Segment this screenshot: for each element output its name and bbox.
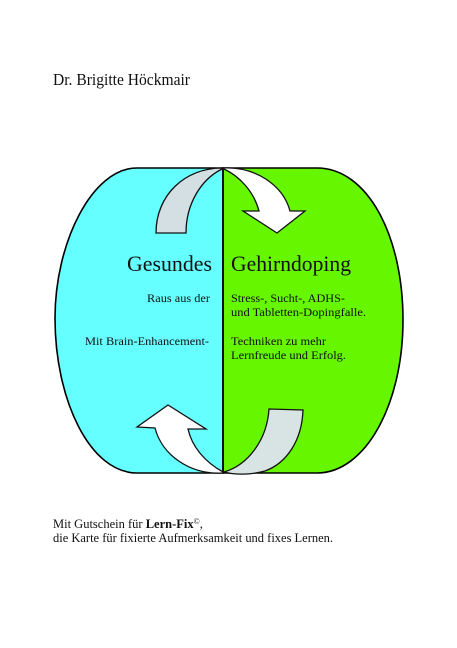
text: right block 2: Techniken zu mehr	[231, 334, 326, 348]
text: right block 2	[231, 334, 346, 362]
author name: Dr. Brigitte Höckmair	[53, 70, 190, 89]
footer text: ,	[200, 517, 203, 531]
text: left line 2: Mit Brain-Enhancement-	[85, 334, 209, 348]
text: right block 2: Lernfreude und Erfolg.	[231, 348, 346, 362]
arrow: top white	[222, 168, 305, 233]
arrow: bottom white	[137, 405, 223, 473]
footer text: ©	[194, 517, 200, 526]
footer text	[53, 517, 333, 545]
arrow: bottom grey	[224, 409, 303, 474]
panel: left cyan half	[55, 168, 223, 473]
central divider	[222, 168, 224, 473]
footer text: die Karte für fixierte Aufmerksamkeit und fixes Lernen.	[53, 531, 333, 545]
text: right block 1: Stress-, Sucht-, ADHS-	[231, 291, 345, 305]
heading: Gehirndoping: Gehirndoping	[231, 251, 351, 276]
panel: right green half	[223, 168, 403, 473]
arrow: top grey	[156, 168, 222, 233]
text: left line 1: Raus aus der	[147, 291, 210, 305]
heading: Gesundes: Gesundes	[127, 251, 212, 276]
footer text: Mit Gutschein für Lern-Fix	[53, 517, 194, 531]
text: right block 1: und Tabletten-Dopingfalle.	[231, 305, 366, 319]
text: right block 1	[231, 291, 366, 319]
